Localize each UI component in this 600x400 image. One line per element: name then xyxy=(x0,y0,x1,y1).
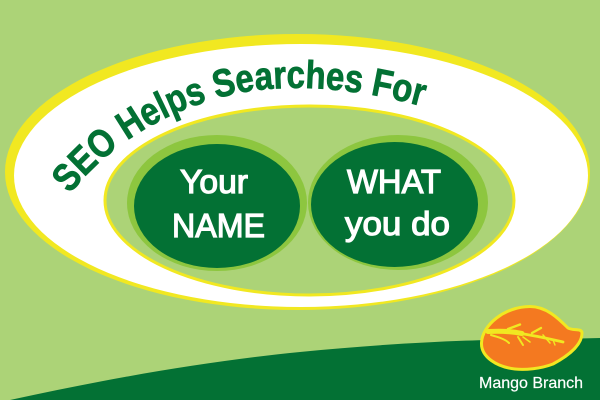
circle: your name: NAME xyxy=(172,207,265,244)
circle: what you do: you do xyxy=(345,205,450,242)
outer ellipse: search field xyxy=(5,34,590,310)
brand name: Mango Branch xyxy=(479,375,583,392)
icon: mango xyxy=(481,306,582,369)
dark green hill xyxy=(10,338,600,400)
circle: your name xyxy=(127,135,307,271)
icon: branch xyxy=(488,324,563,345)
inner ellipse container xyxy=(105,106,514,295)
logo: mango branch xyxy=(479,306,583,392)
label: what you do: WHAT xyxy=(347,163,441,200)
circle: what you do xyxy=(308,135,488,270)
curved heading: SEO Helps Searches For xyxy=(52,59,428,190)
label: your name: Your xyxy=(180,163,248,200)
